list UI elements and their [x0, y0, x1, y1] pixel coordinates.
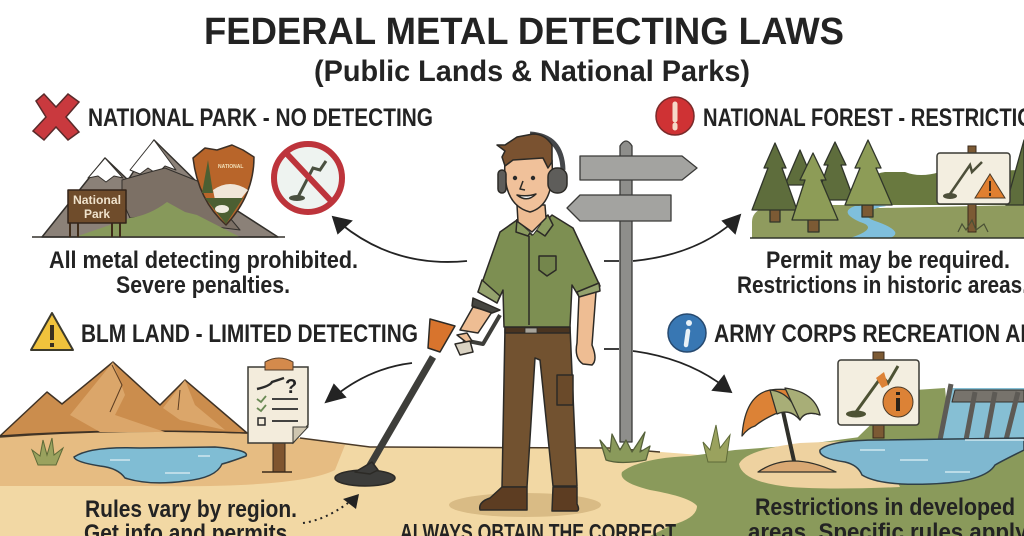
illustration: clipboard sign: [248, 358, 308, 472]
arrow: to BLM land: [326, 363, 412, 402]
panel: national forest: [656, 97, 1024, 299]
icon: blue info: [668, 314, 706, 352]
shadow: [449, 493, 601, 517]
illustration: army corps sign: [838, 352, 919, 438]
ear cups: [548, 168, 567, 193]
illustration: mountains, sign and shield: [32, 140, 285, 237]
icon: red exclamation: [656, 97, 694, 135]
icon: red X: [33, 94, 79, 140]
neck and head: [517, 205, 546, 232]
heading: national park: NATIONAL PARK - NO DETECTING: [88, 104, 433, 132]
text: national park rules: All metal detecting prohibited.: [49, 247, 358, 274]
text: BLM rules: Rules vary by region.: [85, 496, 297, 523]
illustration: desert mountains: [0, 362, 247, 436]
boots: [480, 487, 527, 510]
heading: BLM land: BLM LAND - LIMITED DETECTING: [81, 320, 418, 348]
illustration: mountains, sign and shield: Park: [84, 209, 111, 221]
icon: warning triangle: [31, 313, 73, 350]
illustration: dam and hill: [855, 384, 1024, 440]
signpost: [567, 141, 697, 462]
subtitle: (Public Lands & National Parks): [314, 55, 750, 88]
arrow: to national park: [333, 217, 467, 262]
illustration: mountains, sign and shield: National: [73, 195, 121, 207]
illustration: clipboard sign: ?: [285, 376, 297, 398]
arrow: to army corps: [604, 349, 731, 392]
panel: BLM land: [0, 313, 418, 536]
illustration: forest: [750, 140, 1024, 238]
left arm and detector: [460, 307, 492, 333]
illustration: desert lake: [74, 447, 246, 483]
illustration: grass tuft: [32, 438, 63, 465]
illustration: forest sign: [937, 146, 1010, 232]
headphones band: [530, 134, 563, 170]
shirt: [478, 215, 600, 327]
trousers: [502, 327, 577, 487]
illustration: grass tuft: [703, 425, 730, 462]
icon: no detecting: [274, 144, 342, 212]
right arm: [576, 292, 596, 365]
ground landscape: [0, 420, 1024, 536]
title: FEDERAL METAL DETECTING LAWS: [204, 11, 844, 53]
illustration: mountains, sign and shield: NATIONAL: [218, 164, 243, 170]
panel: national park: [32, 94, 433, 299]
figure: man with metal detector: [335, 134, 601, 517]
illustration: recreation lake: [820, 438, 1024, 484]
arrow: to national forest: [604, 215, 740, 261]
text: national park rules: Severe penalties.: [116, 272, 290, 299]
illustration: sand beach: [739, 440, 900, 488]
arrow: dotted to detector: [303, 494, 359, 523]
panel: army corps: [668, 314, 1024, 536]
illustration: beach umbrella: [742, 388, 836, 472]
